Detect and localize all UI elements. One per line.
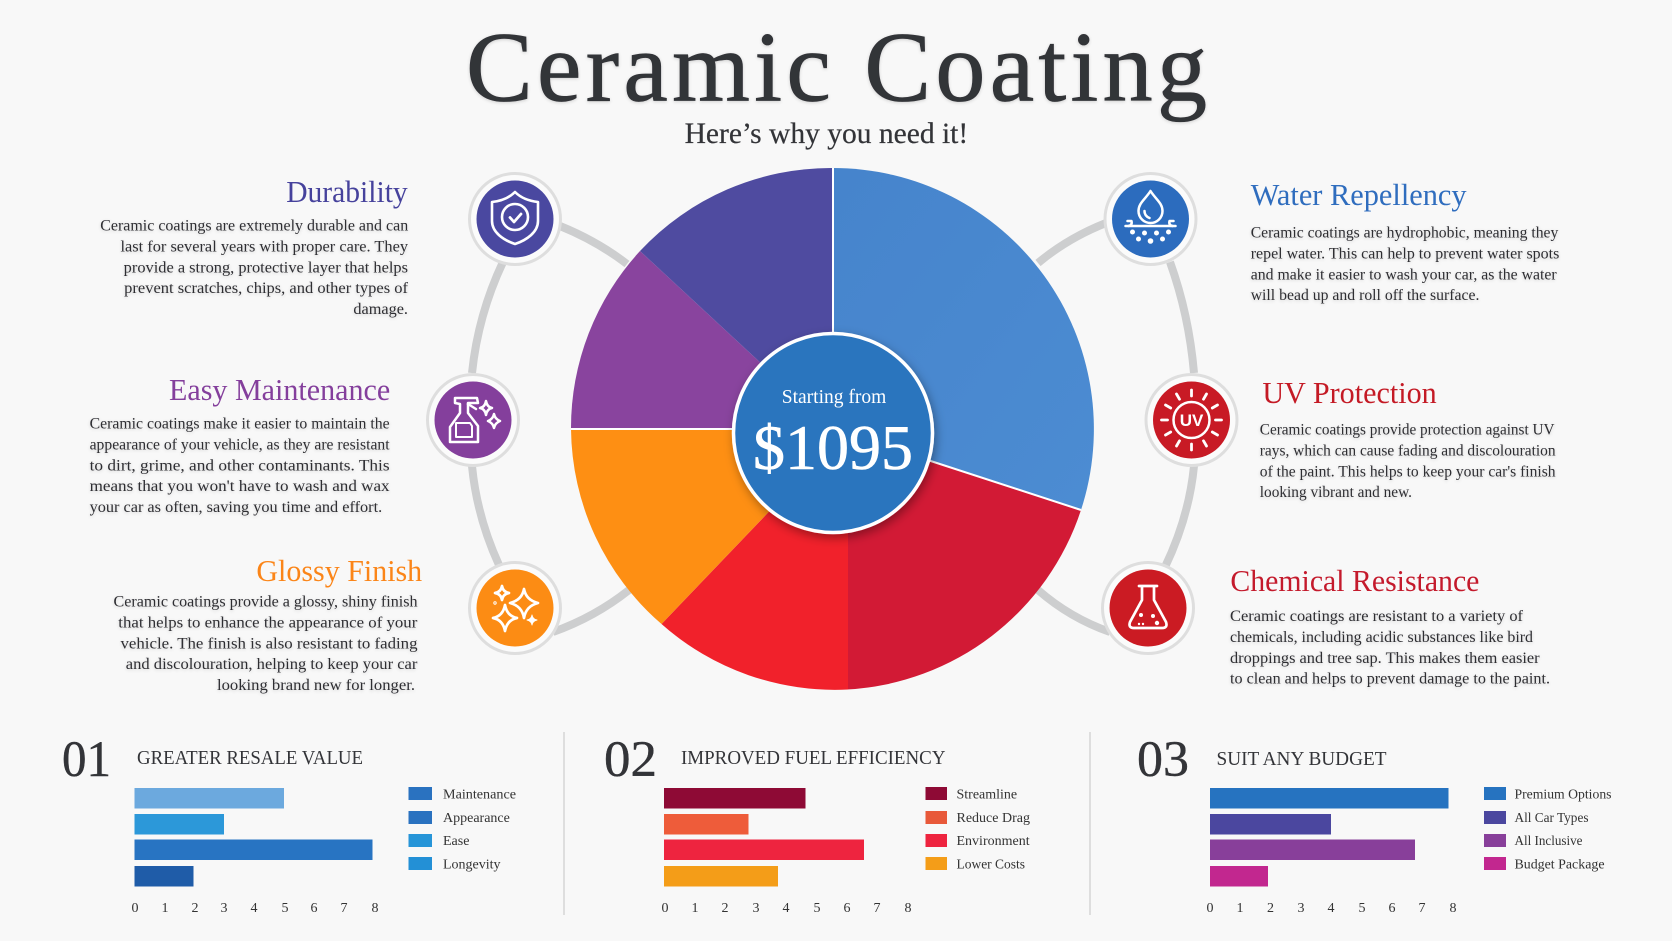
axis: 2	[1267, 901, 1274, 916]
axis	[132, 901, 378, 916]
text: easy maintenance: Ceramic coatings make it easier to maintain the	[90, 416, 390, 433]
text: glossy finish: Ceramic coatings provide a glossy, shiny finish	[114, 594, 418, 611]
text: easy maintenance: means that you won't have to wash and wax	[90, 478, 390, 495]
bar chart	[664, 788, 864, 886]
text: water repellency: will bead up and roll off the surface.	[1251, 287, 1479, 304]
axis: 1	[1236, 901, 1244, 916]
text: easy maintenance: your car as often, saving you time and effort.	[90, 499, 382, 516]
axis: 1	[162, 901, 168, 916]
legend: Appearance	[443, 811, 510, 826]
text: durability: last for several years with proper care. They	[120, 238, 408, 256]
text: glossy finish: vehicle. The finish is also resistant to fading	[120, 635, 418, 652]
pie chart	[571, 168, 1094, 690]
axis: 0	[132, 901, 138, 916]
panel: suit any budget	[1137, 732, 1612, 916]
price label: Starting from	[782, 387, 886, 408]
legend: Streamline	[956, 788, 1017, 802]
text: durability: Ceramic coatings are extremely durable and can	[100, 218, 408, 235]
text: water repellency: repel water. This can help to prevent water spots	[1251, 246, 1559, 262]
text: uv protection	[1260, 422, 1556, 501]
axis: 6	[310, 901, 318, 916]
legend	[408, 787, 516, 872]
price circle	[734, 334, 932, 532]
legend: Budget Package	[1514, 858, 1604, 872]
axis: 8	[904, 901, 912, 916]
axis: 5	[814, 901, 820, 916]
number 01: 01	[62, 732, 111, 788]
text: glossy finish: and discolouration, helping to keep your car	[126, 656, 418, 673]
legend: All Car Types	[1514, 811, 1588, 826]
subtitle: Here’s why you need it!	[685, 118, 968, 150]
number 03: 03	[1137, 732, 1189, 788]
axis: 6	[844, 901, 850, 916]
text: uv protection: Ceramic coatings provide protection against UV	[1260, 422, 1555, 439]
heading: uv protection: UV Protection	[1262, 376, 1437, 410]
bar chart	[1210, 788, 1448, 886]
legend	[926, 787, 1030, 872]
axis: 7	[340, 901, 348, 916]
axis: 4	[782, 901, 790, 916]
axis: 7	[1418, 901, 1426, 916]
axis: 4	[250, 901, 258, 916]
axis: 3	[220, 901, 228, 916]
wedge: easy maintenance	[571, 251, 832, 429]
divider lines	[564, 732, 1090, 915]
connector arcs	[472, 223, 1194, 632]
heading: chemical resistance: Chemical Resistance	[1230, 564, 1479, 598]
axis: 2	[192, 901, 198, 916]
wedge: water repellency	[832, 168, 1094, 510]
text: easy maintenance	[90, 416, 390, 516]
text: water repellency: Ceramic coatings are hydrophobic, meaning they	[1251, 225, 1558, 242]
axis: 8	[372, 901, 378, 916]
text: glossy finish: that helps to enhance the appearance of your	[118, 614, 418, 632]
axis: 7	[874, 901, 880, 916]
text: water repellency: and make it easier to wash your car, as the water	[1251, 266, 1557, 283]
axis: 3	[1298, 901, 1304, 916]
axis: 0	[1206, 901, 1214, 916]
title: Ceramic Coating	[466, 12, 1207, 122]
price value: $1095	[753, 412, 913, 483]
text: durability	[100, 218, 409, 318]
text: chemical resistance: Ceramic coatings are resistant to a variety of	[1230, 608, 1524, 625]
axis: 2	[722, 901, 728, 916]
text: durability: prevent scratches, chips, and other types of	[124, 280, 409, 297]
icon: flask	[1102, 562, 1194, 654]
text: chemical resistance: droppings and tree sap. This makes them easier	[1230, 650, 1540, 667]
panel: greater resale value	[62, 732, 516, 916]
text: easy maintenance: appearance of your vehicle, as they are resistant	[90, 436, 390, 454]
axis	[662, 901, 912, 916]
text: water repellency	[1251, 225, 1559, 304]
axis	[1206, 901, 1456, 916]
heading: GREATER RESALE VALUE	[137, 748, 363, 769]
wedge: chemical resistance	[832, 429, 1081, 690]
icon: spray bottle	[428, 374, 518, 466]
panel: improved fuel efficiency	[604, 732, 1030, 916]
axis: 6	[1388, 901, 1396, 916]
text: durability: provide a strong, protective layer that helps	[124, 259, 408, 276]
heading: glossy finish: Glossy Finish	[256, 554, 422, 588]
legend	[1484, 787, 1612, 872]
text: uv protection: of the paint. This helps to keep your car's finish	[1260, 463, 1556, 480]
axis: 5	[282, 901, 288, 916]
text: glossy finish	[114, 594, 418, 694]
heading: SUIT ANY BUDGET	[1216, 749, 1387, 770]
icon: sparkles	[470, 562, 560, 654]
icon: uv sun: UV	[1180, 411, 1204, 430]
axis: 1	[692, 901, 698, 916]
legend: Reduce Drag	[956, 811, 1030, 826]
heading: easy maintenance: Easy Maintenance	[169, 373, 390, 407]
icon: uv sun	[1146, 374, 1237, 466]
legend: Longevity	[443, 858, 501, 872]
axis: 5	[1358, 901, 1366, 916]
axis: 8	[1450, 901, 1456, 916]
heading: water repellency: Water Repellency	[1251, 178, 1467, 212]
text: uv protection: rays, which can cause fading and discolouration	[1260, 442, 1556, 460]
text: uv protection: looking vibrant and new.	[1260, 484, 1412, 501]
legend: Environment	[956, 834, 1030, 849]
number 02: 02	[604, 732, 657, 788]
icon: water drop	[1105, 174, 1196, 264]
text: glossy finish: looking brand new for longer.	[217, 677, 415, 694]
text: easy maintenance: to dirt, grime, and other contaminants. This	[90, 457, 390, 474]
wedge: glossy finish	[571, 429, 848, 624]
legend: All Inclusive	[1514, 834, 1582, 849]
axis: 3	[752, 901, 760, 916]
text: chemical resistance	[1230, 608, 1550, 688]
icon: shield	[470, 174, 560, 264]
wedge: uv protection	[662, 429, 848, 690]
bar chart	[134, 788, 372, 886]
axis: 4	[1328, 901, 1334, 916]
legend: Ease	[443, 834, 469, 849]
text: chemical resistance: chemicals, including acidic substances like bird	[1230, 629, 1533, 646]
wedge: durability	[640, 168, 832, 429]
text: durability: damage.	[353, 301, 408, 318]
heading: IMPROVED FUEL EFFICIENCY	[681, 748, 946, 769]
legend: Lower Costs	[956, 858, 1025, 872]
axis: 0	[662, 901, 668, 916]
text: chemical resistance: to clean and helps to prevent damage to the paint.	[1230, 671, 1550, 688]
legend: Premium Options	[1514, 788, 1612, 802]
heading: durability: Durability	[286, 175, 408, 209]
legend: Maintenance	[443, 788, 516, 802]
